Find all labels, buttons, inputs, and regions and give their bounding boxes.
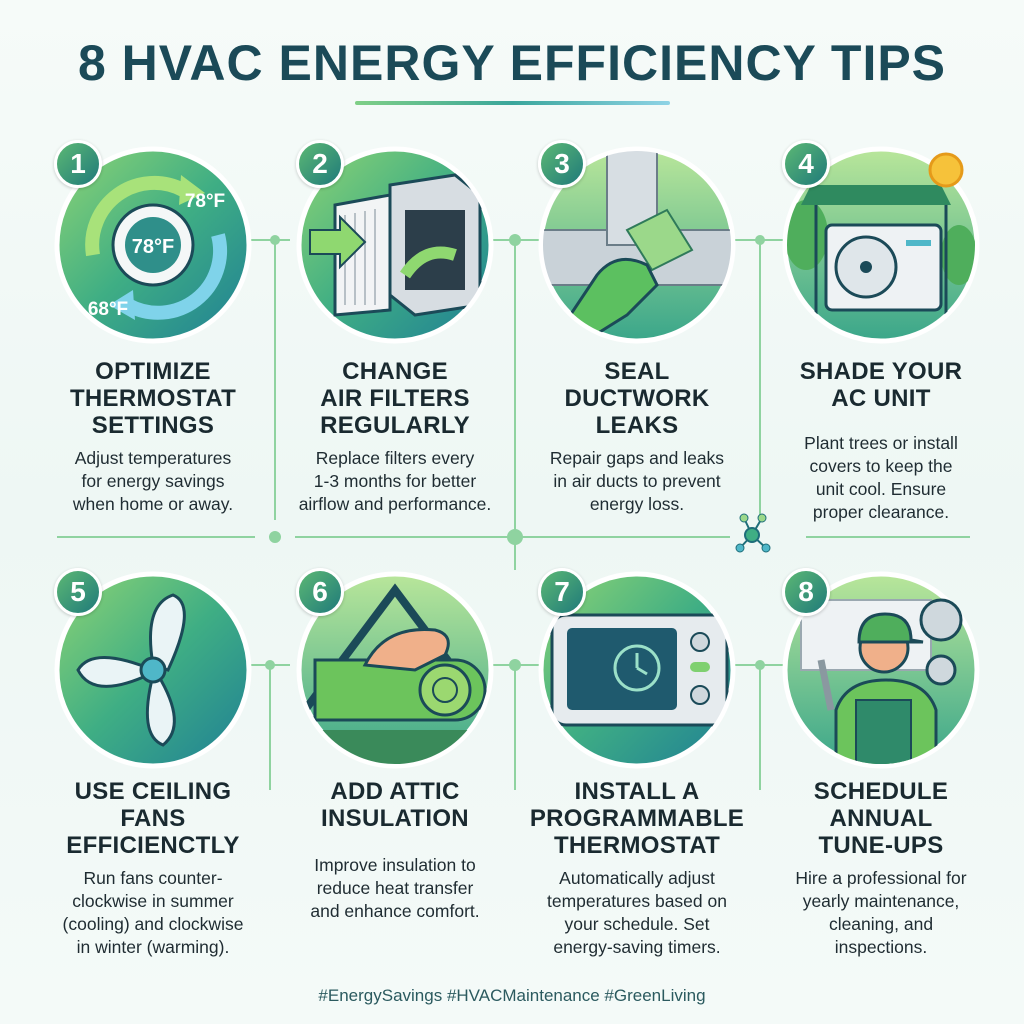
text: tip 1: THERMOSTAT bbox=[70, 385, 236, 412]
icon: thermostat circle bbox=[54, 146, 252, 344]
text: tip 1: for energy savings bbox=[82, 471, 224, 491]
text: tip 2: CHANGE bbox=[342, 358, 448, 385]
text: tip 8 bbox=[795, 778, 967, 957]
icon: AC unit circle bbox=[782, 146, 980, 344]
badge 7: 7 bbox=[554, 576, 570, 607]
badge 4 bbox=[782, 140, 830, 188]
text: tip 7 bbox=[530, 778, 744, 957]
icon: thermostat circle: 68°F bbox=[88, 299, 128, 320]
text: tip 8: SCHEDULE bbox=[814, 778, 948, 805]
text: tip 3: in air ducts to prevent bbox=[553, 471, 721, 491]
badge 8: 8 bbox=[798, 576, 814, 607]
icon: air filter circle bbox=[296, 146, 494, 344]
text: tip 4: covers to keep the bbox=[810, 456, 952, 476]
text: tip 2: AIR FILTERS bbox=[320, 385, 470, 412]
text: tip 4: SHADE YOUR bbox=[800, 358, 962, 385]
text: tip 3: SEAL bbox=[604, 358, 670, 385]
panel: tip 8 bbox=[780, 568, 980, 957]
text: tip 5: clockwise in summer bbox=[72, 891, 234, 911]
badge 2 bbox=[296, 140, 344, 188]
text: tip 6: Improve insulation to bbox=[314, 855, 476, 875]
text: tip 8: ANNUAL bbox=[829, 805, 933, 832]
text: tip 8: inspections. bbox=[835, 937, 927, 957]
badge 3: 3 bbox=[554, 148, 570, 179]
title: 8 HVAC ENERGY EFFICIENCY TIPS bbox=[78, 35, 946, 91]
panel: tip 6 bbox=[294, 568, 494, 921]
text: tip 4: unit cool. Ensure bbox=[816, 479, 946, 499]
text: tip 6 bbox=[310, 778, 480, 921]
text: tip 1: OPTIMIZE bbox=[95, 358, 211, 385]
badge 4: 4 bbox=[798, 148, 814, 179]
text: tip 7: temperatures based on bbox=[547, 891, 727, 911]
text: tip 8: yearly maintenance, bbox=[803, 891, 959, 911]
badge 6: 6 bbox=[312, 576, 328, 607]
text: tip 7: energy-saving timers. bbox=[553, 937, 721, 957]
text: tip 4: proper clearance. bbox=[813, 502, 949, 522]
text: tip 7: your schedule. Set bbox=[565, 914, 709, 934]
panel: tip 3 bbox=[536, 140, 736, 514]
text: tip 3: energy loss. bbox=[590, 494, 684, 514]
text: tip 4: Plant trees or install bbox=[804, 433, 958, 453]
badge 6 bbox=[296, 568, 344, 616]
text: tip 2 bbox=[299, 358, 491, 514]
text: tip 5: Run fans counter- bbox=[83, 868, 223, 888]
text: tip 1: SETTINGS bbox=[92, 412, 214, 439]
icon: fan circle bbox=[54, 572, 252, 768]
text: tip 8: TUNE-UPS bbox=[818, 832, 944, 859]
text: tip 5: in winter (warming). bbox=[77, 937, 229, 957]
text: tip 5: FANS bbox=[120, 805, 186, 832]
badge 5: 5 bbox=[70, 576, 86, 607]
panel: tip 7 bbox=[530, 568, 744, 957]
badge 8 bbox=[782, 568, 830, 616]
icon: technician circle bbox=[782, 572, 980, 768]
text: tip 1: when home or away. bbox=[73, 494, 233, 514]
text: tip 7: PROGRAMMABLE bbox=[530, 805, 744, 832]
text: tip 3: LEAKS bbox=[596, 412, 678, 439]
text: tip 6: reduce heat transfer bbox=[317, 878, 473, 898]
icon: molecule bbox=[736, 514, 770, 552]
panel: tip 5 bbox=[52, 568, 252, 957]
panel: tip 4 bbox=[780, 140, 980, 522]
icon: programmable thermostat circle bbox=[538, 572, 736, 768]
text: tip 5: EFFICIENCTLY bbox=[66, 832, 240, 859]
text: tip 1 bbox=[70, 358, 236, 514]
text: tip 2: 1-3 months for better bbox=[314, 471, 476, 491]
text: tip 6: and enhance comfort. bbox=[310, 901, 480, 921]
text: tip 8: cleaning, and bbox=[829, 914, 933, 934]
text: tip 1: Adjust temperatures bbox=[75, 448, 231, 468]
hashtags: #EnergySavings #HVACMaintenance #GreenLiving bbox=[318, 986, 706, 1005]
badge 7 bbox=[538, 568, 586, 616]
text: tip 8: Hire a professional for bbox=[795, 868, 967, 888]
badge 5 bbox=[54, 568, 102, 616]
text: tip 3 bbox=[550, 358, 724, 514]
badge 3 bbox=[538, 140, 586, 188]
panel: tip 1 bbox=[52, 140, 252, 514]
icon: duct circle bbox=[538, 146, 736, 344]
text: tip 2: REGULARLY bbox=[320, 412, 470, 439]
badge 1 bbox=[54, 140, 102, 188]
text: tip 5 bbox=[63, 778, 243, 957]
icon: insulation circle bbox=[296, 572, 494, 768]
badge 2: 2 bbox=[312, 148, 328, 179]
text: tip 2: Replace filters every bbox=[316, 448, 474, 468]
text: tip 2: airflow and performance. bbox=[299, 494, 491, 514]
text: tip 5: USE CEILING bbox=[75, 778, 231, 805]
text: tip 4: AC UNIT bbox=[831, 385, 931, 412]
text: tip 6: ADD ATTIC bbox=[330, 778, 460, 805]
text: tip 7: THERMOSTAT bbox=[554, 832, 720, 859]
badge 1: 1 bbox=[70, 148, 86, 179]
text: tip 6: INSULATION bbox=[321, 805, 469, 832]
text: tip 3: Repair gaps and leaks bbox=[550, 448, 724, 468]
text: tip 4 bbox=[800, 358, 962, 522]
text: tip 7: INSTALL A bbox=[575, 778, 699, 805]
icon: thermostat circle: 78°F bbox=[185, 191, 225, 212]
text: tip 5: (cooling) and clockwise bbox=[63, 914, 243, 934]
panel: tip 2 bbox=[294, 140, 494, 514]
icon: thermostat circle: 78°F bbox=[132, 236, 174, 258]
text: tip 7: Automatically adjust bbox=[559, 868, 715, 888]
text: tip 3: DUCTWORK bbox=[564, 385, 710, 412]
